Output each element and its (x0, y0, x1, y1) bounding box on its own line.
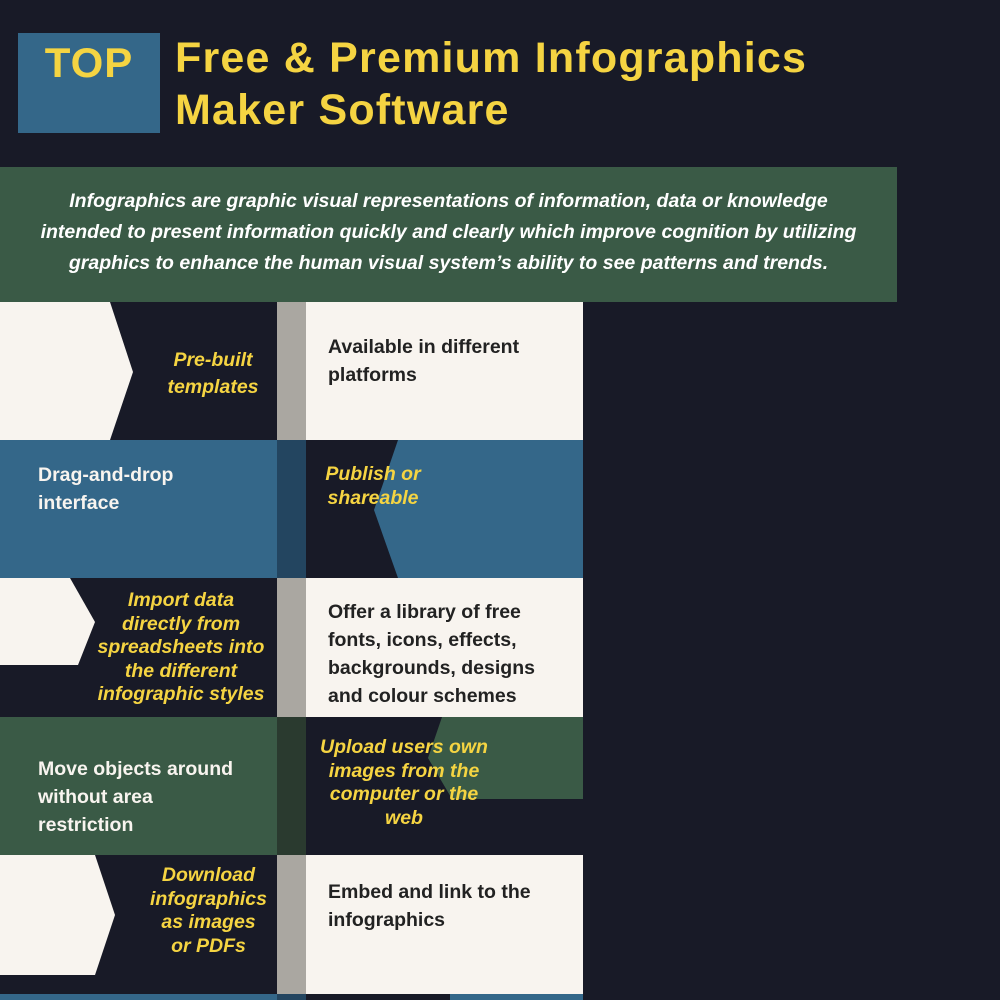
item: download: or PDFs (171, 934, 246, 956)
item: library: Offer a library of free (328, 601, 521, 623)
item: pre-built templates: templates (167, 376, 259, 398)
item: library: fonts, icons, effects, (328, 629, 517, 651)
item: upload images: web (385, 806, 423, 828)
item: import data: spreadsheets into (98, 636, 264, 658)
item: download (150, 864, 267, 956)
item: upload images: Upload users own (320, 736, 488, 758)
item: available in different platforms (328, 336, 519, 386)
title: Free & Premium Infographics (175, 34, 807, 82)
item: download: infographics (150, 888, 267, 910)
item: upload images (320, 736, 488, 828)
title badge: TOP: TOP (45, 39, 133, 86)
intro text panel: graphics to enhance the human visual system’s ability to see patterns and trends. (69, 252, 828, 274)
item: move objects: Move objects around (38, 758, 233, 780)
intro text panel: Infographics are graphic visual representations of information, data or knowledge (69, 190, 828, 212)
item: library (328, 601, 535, 707)
item: embed and link: infographics (328, 909, 445, 931)
intro text panel (0, 167, 897, 302)
item: library: and colour schemes (328, 685, 517, 707)
title (175, 34, 807, 134)
title badge: TOP (18, 33, 160, 133)
item: upload images: computer or the (330, 783, 478, 805)
title: Maker Software (175, 86, 510, 134)
item: import data: Import data (128, 589, 234, 611)
item: download: Download (162, 864, 255, 886)
intro text panel: intended to present information quickly and clearly which improve cognition by utilizing (41, 221, 856, 243)
item: pre-built templates: Pre-built (173, 349, 253, 371)
item: import data: the different (125, 660, 237, 682)
item: available in different platforms: platforms (328, 364, 417, 386)
item: move objects: restriction (38, 814, 133, 836)
item: import data (98, 589, 264, 705)
item: drag-and-drop (38, 464, 173, 514)
item: download: as images (161, 911, 256, 933)
item: publish or shareable: shareable (327, 487, 419, 509)
item: move objects: without area (38, 786, 153, 808)
item: drag-and-drop: interface (38, 492, 119, 514)
item: import data: directly from (122, 612, 240, 634)
item: import data: infographic styles (98, 683, 264, 705)
item: available in different platforms: Available in different (328, 336, 519, 358)
item: publish or shareable (325, 463, 422, 509)
item: embed and link: Embed and link to the (328, 881, 531, 903)
feature grid (0, 302, 583, 1000)
item: upload images: images from the (329, 760, 479, 782)
item: drag-and-drop: Drag-and-drop (38, 464, 173, 486)
item: embed and link (328, 881, 531, 931)
item: publish or shareable: Publish or (325, 463, 421, 485)
item: library: backgrounds, designs (328, 657, 535, 679)
item: move objects (38, 758, 233, 836)
item: pre-built templates (167, 349, 259, 398)
